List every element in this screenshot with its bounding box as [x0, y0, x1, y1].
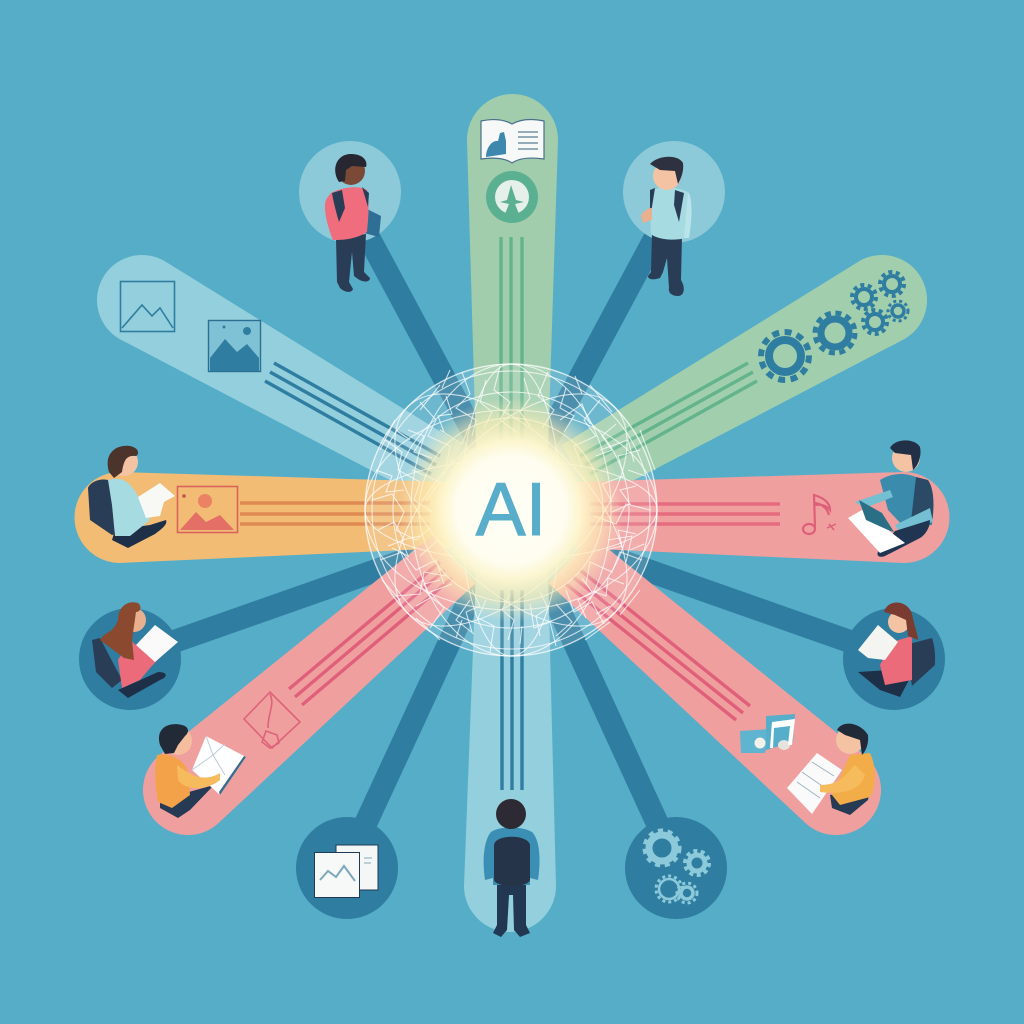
band: pale blue upper left [97, 255, 462, 501]
person: lower-right reader [787, 724, 875, 815]
person: top-right standing [641, 157, 692, 296]
icon: picture outline, pale band [120, 282, 174, 332]
person: right circle reader [858, 602, 935, 697]
circle: left person [79, 608, 181, 710]
circle: bottom-left documents [296, 817, 398, 919]
icons: gears on green band [761, 272, 908, 380]
icon: open book on green band [481, 120, 544, 163]
circle: bottom-right gears [625, 817, 727, 919]
person: top-left standing [325, 154, 381, 292]
icon: map outline [244, 692, 300, 748]
icon: green roundel [486, 171, 538, 223]
person: bottom standing with backpack [484, 799, 540, 937]
person: right seated pink band [848, 440, 933, 557]
band: pink right [575, 472, 950, 563]
band: pink lower left [143, 535, 475, 835]
circle: right person [843, 608, 945, 710]
band: pale blue bottom [464, 570, 556, 932]
icon: picture filled, pale band [208, 320, 260, 372]
band: green top [467, 94, 558, 450]
icon: music note on pink band [803, 495, 836, 534]
band: green upper right [562, 255, 927, 501]
person: left circle reader [92, 602, 178, 698]
circle: top-left person [299, 141, 401, 243]
band: orange left [74, 472, 450, 563]
stripes on bands [240, 237, 780, 790]
person: left seated orange band [88, 446, 175, 548]
person: lower-left reader [155, 724, 246, 818]
spokes [150, 225, 874, 840]
network sphere [355, 354, 667, 666]
icon: picture on orange band [178, 486, 238, 532]
title: AI: AI [476, 467, 546, 551]
icon: gears in circle [645, 831, 709, 903]
band: pink lower right [549, 535, 881, 835]
icon: documents [314, 845, 378, 898]
circle: top-right person [623, 141, 725, 243]
central glow [399, 398, 623, 622]
icon: music tile [740, 714, 795, 753]
